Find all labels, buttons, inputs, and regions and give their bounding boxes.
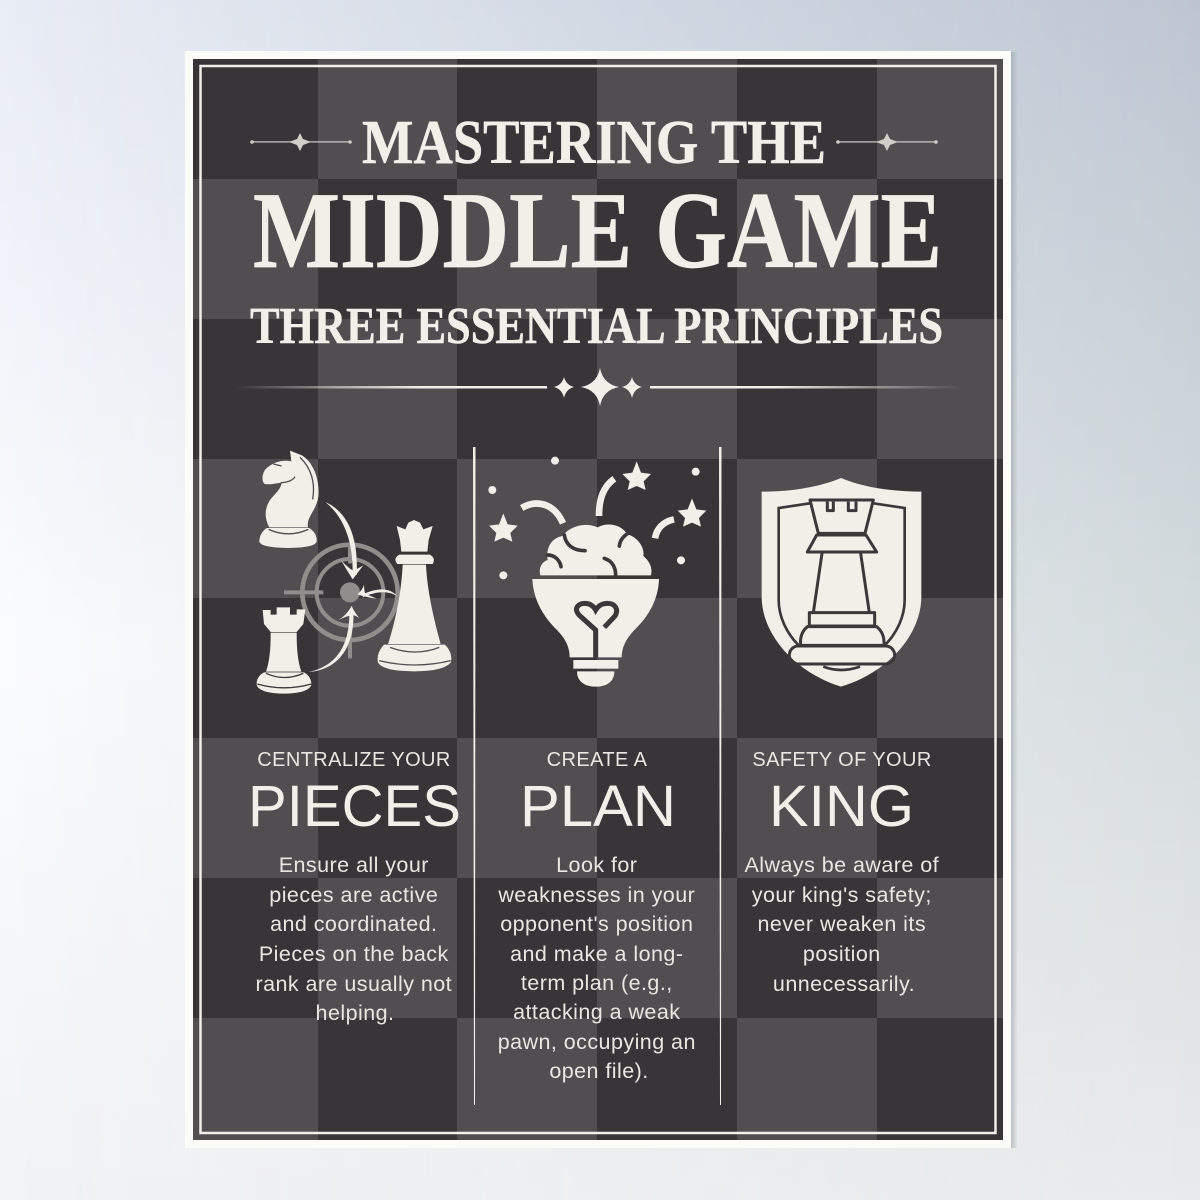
stars — [622, 461, 651, 490]
shield — [762, 478, 921, 687]
icon: centralize pieces — [257, 451, 451, 694]
subtitle: three essential principles: THREE ESSENTIAL PRINCIPLES — [250, 298, 943, 355]
arrows to the centre — [309, 502, 397, 672]
column 1: centralize your pieces — [248, 749, 461, 1025]
brain — [540, 525, 651, 575]
poster checkerboard background — [180, 40, 1017, 1148]
column 2 body: Look for — [556, 853, 637, 877]
column 3 body: never weaken its — [758, 912, 926, 936]
filament heart — [577, 603, 617, 658]
column 2 heading: PLAN — [520, 774, 676, 839]
sparks — [522, 479, 674, 538]
column 2 body: and make a long- — [510, 942, 683, 966]
shield inner line — [779, 503, 905, 670]
column 2 body: weaknesses in your — [497, 883, 695, 907]
rook outline — [789, 500, 895, 664]
column 2 body: term plan (e.g., — [521, 971, 673, 995]
knight — [259, 451, 319, 548]
title line: middle game: MIDDLE GAME — [253, 170, 942, 291]
inner border frame — [200, 66, 996, 1133]
column 1 body: pieces are active — [269, 883, 438, 907]
column 3 body: your king's safety; — [752, 883, 932, 907]
column 3 kicker: SAFETY OF YOUR — [752, 749, 932, 771]
title line: mastering the: MASTERING THE — [362, 109, 826, 177]
column 2 body: attacking a weak — [513, 1000, 680, 1024]
column 2 body: open file). — [549, 1059, 649, 1083]
column 1 body: rank are usually not — [255, 972, 452, 996]
column 1 heading: PIECES — [248, 774, 461, 839]
column 2 body: opponent's position — [500, 912, 693, 936]
column 1 body: Ensure all your — [279, 853, 429, 877]
poster sheet — [185, 51, 1011, 1148]
column 2: create a plan — [497, 749, 702, 1083]
column 1 body: helping. — [316, 1001, 394, 1025]
bulb — [532, 579, 659, 657]
icon: brain light bulb — [488, 457, 706, 687]
queen — [378, 520, 451, 671]
column 1 body: Pieces on the back — [259, 942, 449, 966]
ornament: right flourish — [836, 133, 938, 151]
column dividers — [473, 447, 722, 1105]
icon: rook in shield — [762, 478, 921, 687]
column 3 body: unnecessarily. — [773, 972, 915, 996]
divider with stars — [235, 368, 962, 406]
rook — [257, 607, 311, 694]
column 1 body: and coordinated. — [270, 912, 437, 936]
column 3: safety of your king — [745, 749, 945, 996]
column 2 body: pawn, occupying an — [498, 1030, 696, 1054]
column 3 heading: KING — [769, 774, 914, 839]
column 2 kicker: CREATE A — [547, 749, 648, 771]
ornament: left flourish — [250, 133, 352, 151]
column 1 kicker: CENTRALIZE YOUR — [257, 749, 451, 771]
target crosshair — [284, 545, 398, 658]
column 3 body: Always be aware of — [745, 853, 939, 877]
column 3 body: position — [803, 942, 881, 966]
